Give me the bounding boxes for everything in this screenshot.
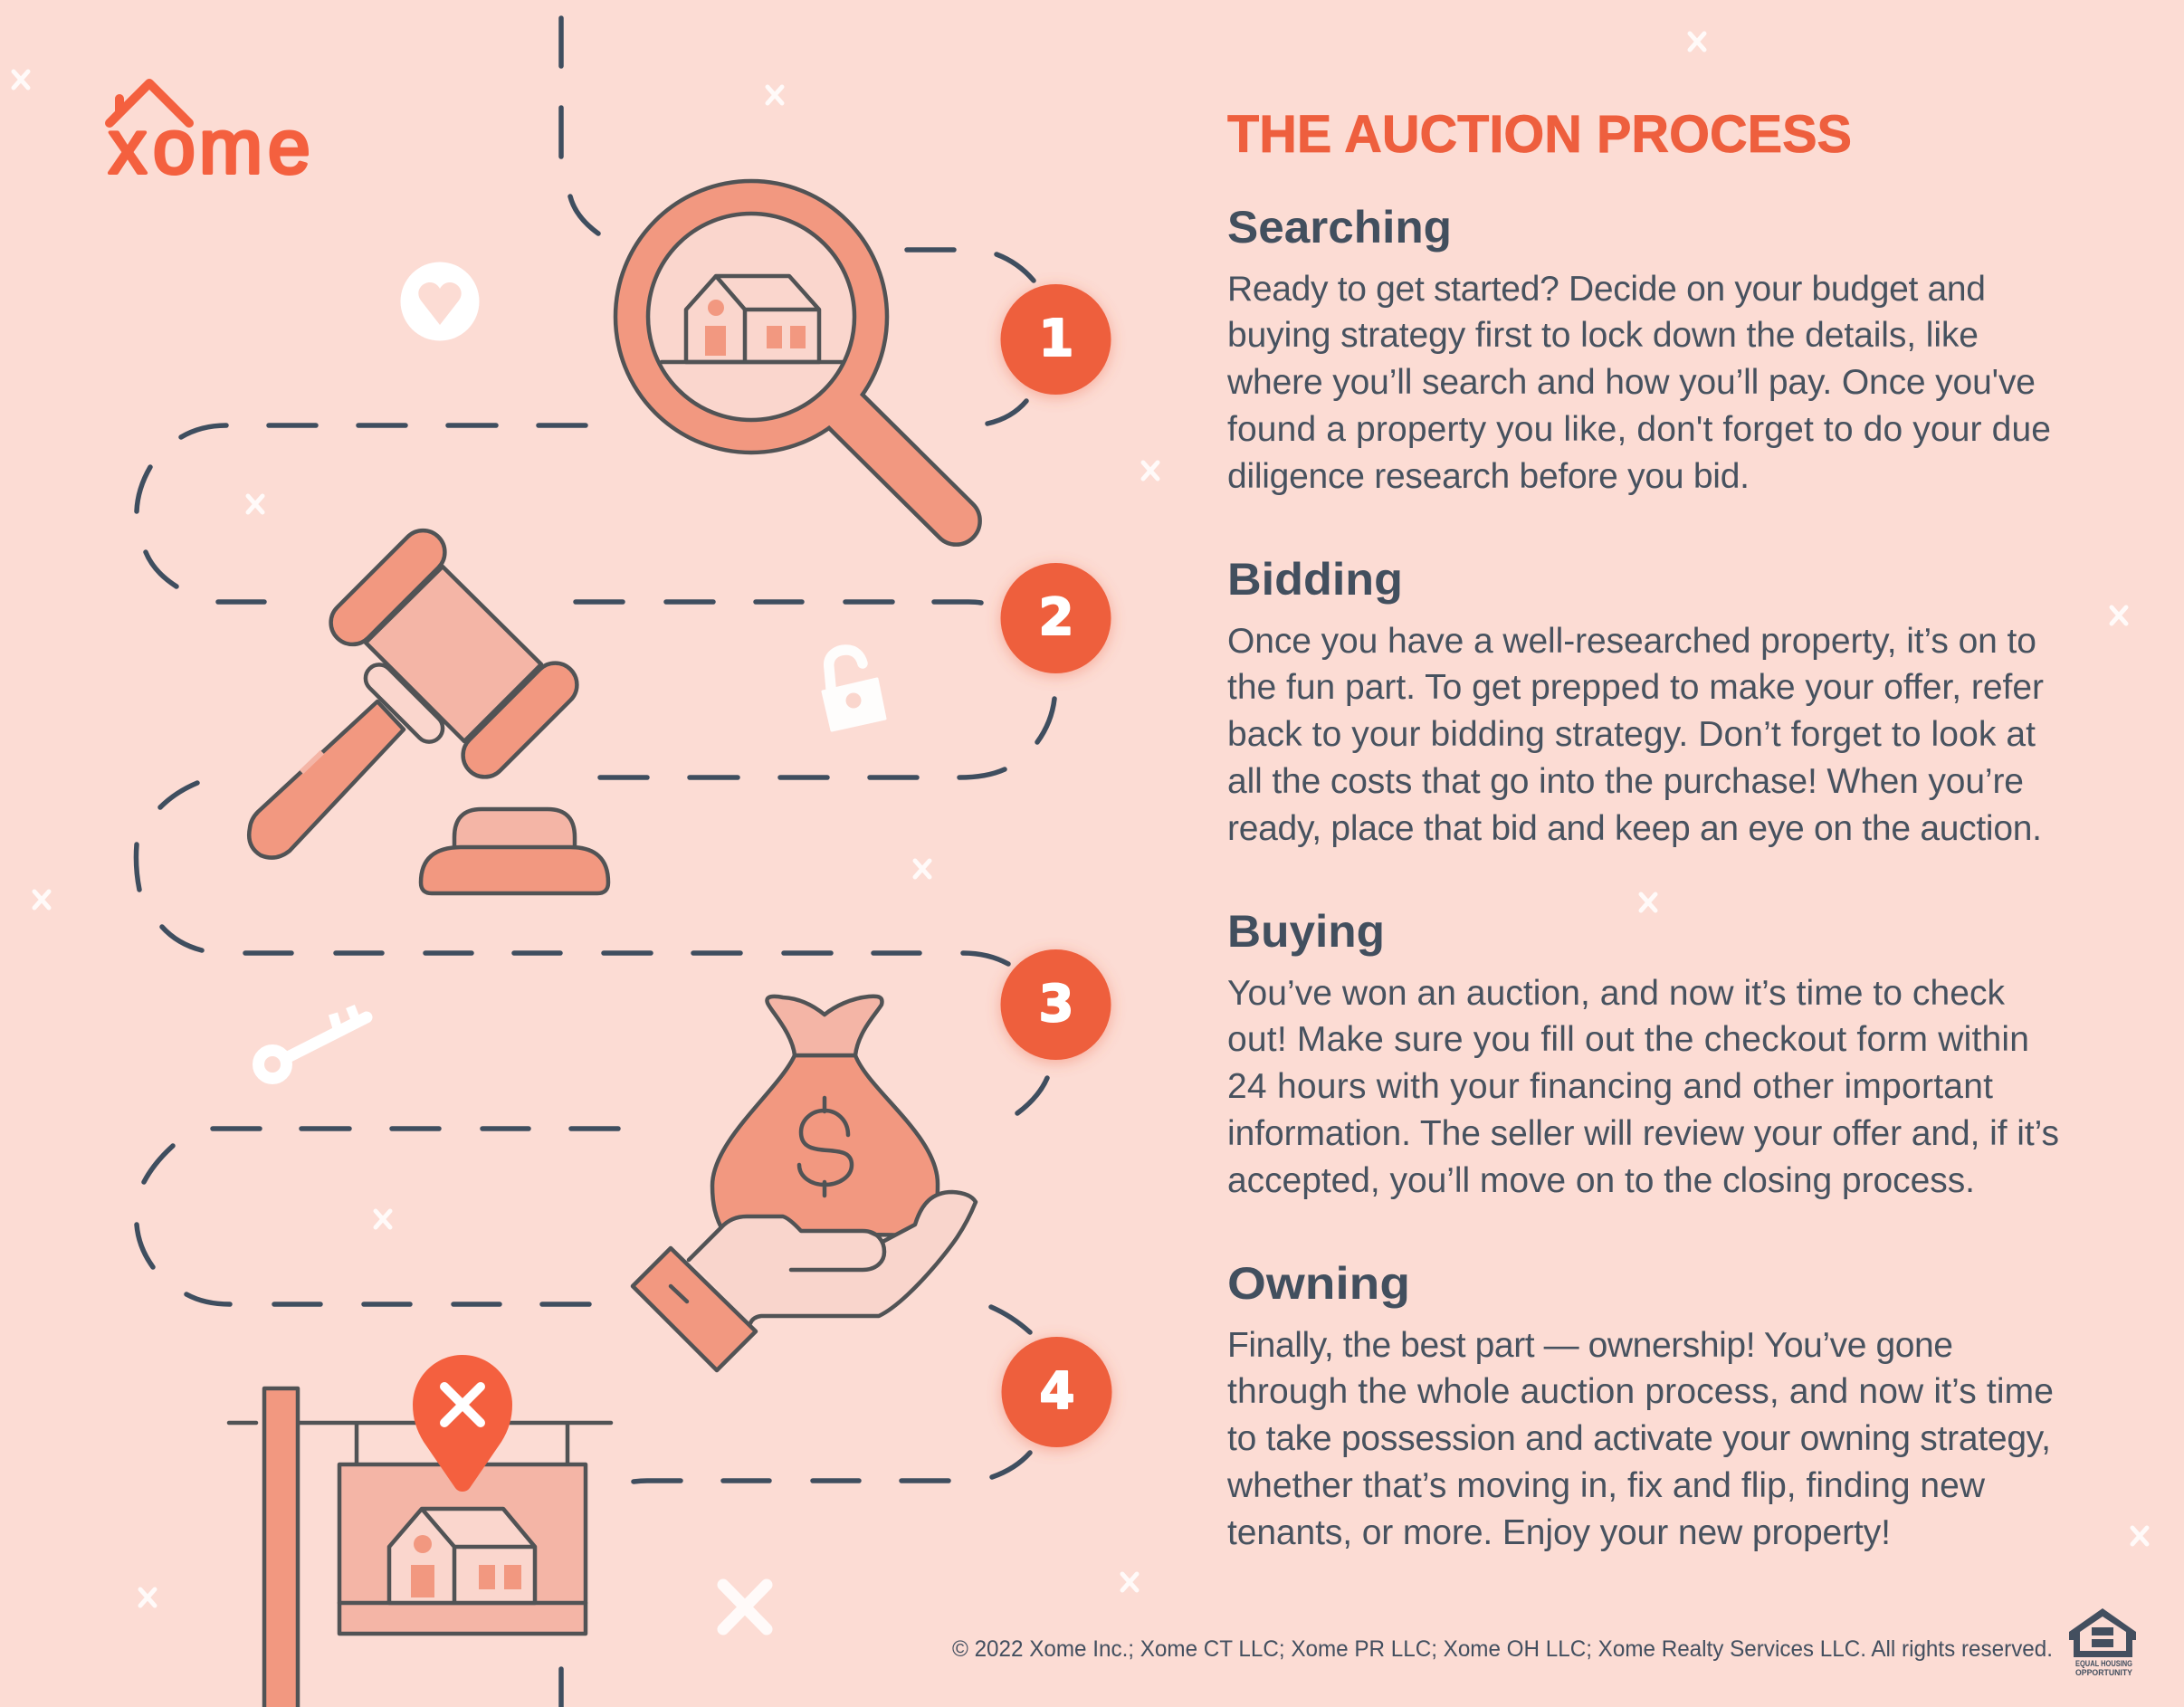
title: THE AUCTION PROCESS: [1227, 105, 1852, 164]
number badge 1: 1: [1039, 310, 1073, 368]
text: searching: where you’ll search and how you’ll pay. Once you've: [1226, 363, 2036, 402]
text: searching: Ready to get started? Decide on your budget and: [1227, 270, 1986, 309]
text: owning: tenants, or more. Enjoy your new property!: [1227, 1513, 1891, 1552]
icon: gavel: [249, 521, 608, 893]
text: bidding: [1227, 622, 2044, 848]
text: buying: information. The seller will review your offer and, if it’s: [1227, 1114, 2059, 1153]
text: buying: 24 hours with your financing and other important: [1227, 1067, 1993, 1106]
icon: equal housing opportunity: OPPORTUNITY: [2075, 1668, 2132, 1677]
number badge 1: [1001, 284, 1111, 395]
cuff: [633, 1248, 756, 1370]
text: owning: to take possession and activate your owning strategy,: [1227, 1419, 2051, 1458]
number badge 2: [1001, 563, 1111, 673]
heading: buying: Buying: [1227, 906, 1385, 957]
text: searching: found a property you like, don't forget to do your due: [1227, 410, 2051, 449]
house on sign: [389, 1509, 535, 1603]
house in lens: [662, 276, 842, 362]
panel: buying: [1227, 906, 2059, 1200]
dollar sign: [799, 1098, 852, 1196]
number badge 4: [1001, 1337, 1111, 1447]
text: buying: [1227, 974, 2059, 1200]
gavel sound block: [421, 809, 608, 893]
text: buying: out! Make sure you fill out the checkout form within: [1227, 1020, 2029, 1059]
text: bidding: back to your bidding strategy. Don’t forget to look at: [1227, 715, 2036, 754]
text: owning: through the whole auction process, and now it’s time: [1227, 1372, 2054, 1411]
icon: open lock: [823, 650, 885, 730]
text: bidding: the fun part. To get prepped to make your offer, refer: [1227, 668, 2044, 707]
panel: owning: [1226, 1258, 2054, 1552]
icon: key: [259, 1006, 367, 1079]
text: owning: [1226, 1326, 2054, 1552]
text: owning: Finally, the best part — ownership! You’ve gone: [1227, 1326, 1953, 1365]
text: searching: buying strategy first to lock down the details, like: [1227, 316, 1979, 355]
hand: [689, 1192, 976, 1323]
panel: searching: [1226, 202, 2051, 496]
icon: house sign with map pin: [229, 1355, 611, 1707]
text: buying: You’ve won an auction, and now it’s time to check: [1227, 974, 2006, 1013]
heading: searching: Searching: [1227, 202, 1452, 253]
logo: xome: xome: [109, 104, 310, 189]
text: searching: [1226, 270, 2051, 496]
number badge 3: [1001, 949, 1111, 1060]
icon: money bag on hand: [633, 997, 976, 1370]
dashed path: [136, 18, 1054, 1707]
heading: owning: Owning: [1227, 1258, 1410, 1309]
text: buying: accepted, you’ll move on to the closing process.: [1227, 1161, 1975, 1200]
icon: magnifying glass: [615, 181, 980, 545]
heading: bidding: Bidding: [1227, 554, 1403, 605]
number badge 4: 4: [1040, 1362, 1074, 1421]
text: bidding: all the costs that go into the purchase! When you’re: [1227, 762, 2024, 801]
number badge 2: 2: [1039, 588, 1073, 647]
icon: equal housing opportunity: EQUAL HOUSING: [2075, 1659, 2132, 1668]
icon: heart badge: [400, 262, 480, 340]
text: bidding: ready, place that bid and keep an eye on the auction.: [1227, 809, 2042, 848]
text: searching: diligence research before you bid.: [1227, 457, 1750, 496]
icon: equal housing opportunity: [2069, 1608, 2136, 1677]
map pin: [413, 1355, 512, 1492]
text: bidding: Once you have a well-researched property, it’s on to: [1227, 622, 2036, 661]
number badge 3: 3: [1039, 975, 1073, 1034]
copyright footer: © 2022 Xome Inc.; Xome CT LLC; Xome PR LLC; Xome OH LLC; Xome Realty Services LLC. All rights reserved.: [952, 1636, 2053, 1662]
text: owning: whether that’s moving in, fix and flip, finding new: [1226, 1466, 1986, 1505]
panel: bidding: [1227, 554, 2044, 848]
